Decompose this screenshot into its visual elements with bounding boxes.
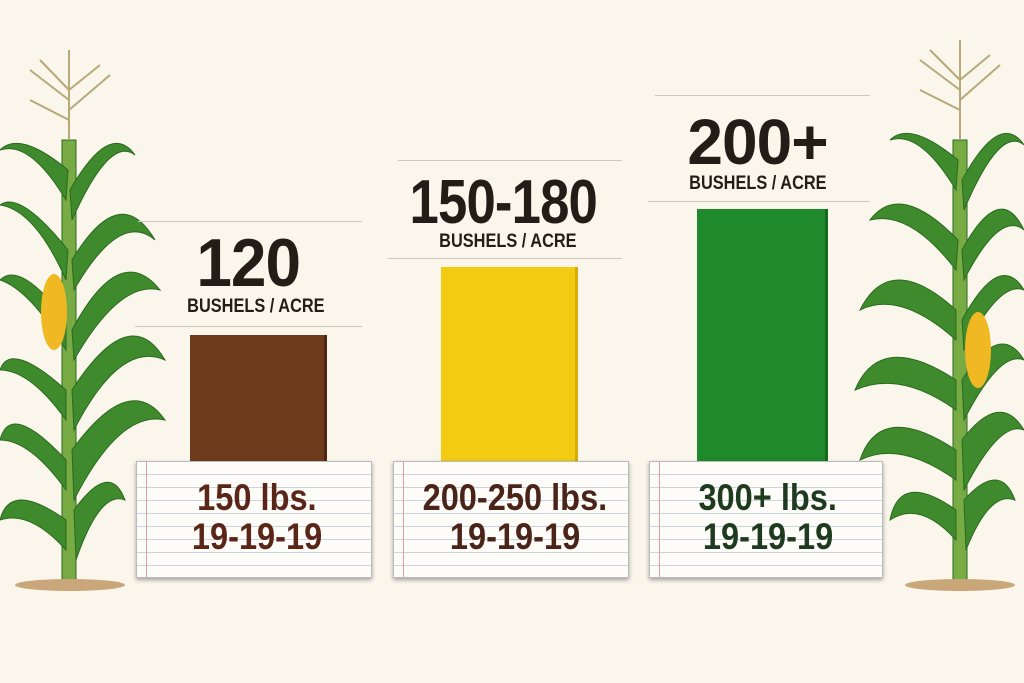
card: 150 lbs: 150 lbs. xyxy=(197,477,317,518)
card: 200-250 lbs: 200-250 lbs. xyxy=(423,477,607,518)
heading: 200+: 200+ xyxy=(687,106,828,178)
label: bushels/acre: BUSHELS / ACRE xyxy=(439,231,576,252)
panel: 150-180 bushels xyxy=(388,160,632,582)
card: 300+ lbs: 300+ lbs. xyxy=(699,477,837,518)
card: 200-250 lbs xyxy=(393,461,629,578)
label: bushels/acre: BUSHELS / ACRE xyxy=(689,173,826,194)
bar: yellow xyxy=(441,267,578,461)
bar: brown xyxy=(190,335,327,461)
card: 300+ lbs: 19-19-19 xyxy=(703,516,833,557)
heading: 150-180: 150-180 xyxy=(410,168,597,237)
card: 150 lbs: 19-19-19 xyxy=(192,516,322,557)
corn plant left xyxy=(0,50,166,591)
card: 150 lbs xyxy=(136,461,372,578)
card: 300+ lbs xyxy=(649,461,883,578)
heading: 120: 120 xyxy=(196,225,300,301)
label: bushels/acre: BUSHELS / ACRE xyxy=(187,296,325,317)
bar: green xyxy=(697,209,828,461)
corn plant right xyxy=(854,40,1024,591)
panel: 120 bushels xyxy=(134,221,374,582)
card: 200-250 lbs: 19-19-19 xyxy=(450,516,580,557)
panel: 200+ bushels xyxy=(646,95,886,582)
